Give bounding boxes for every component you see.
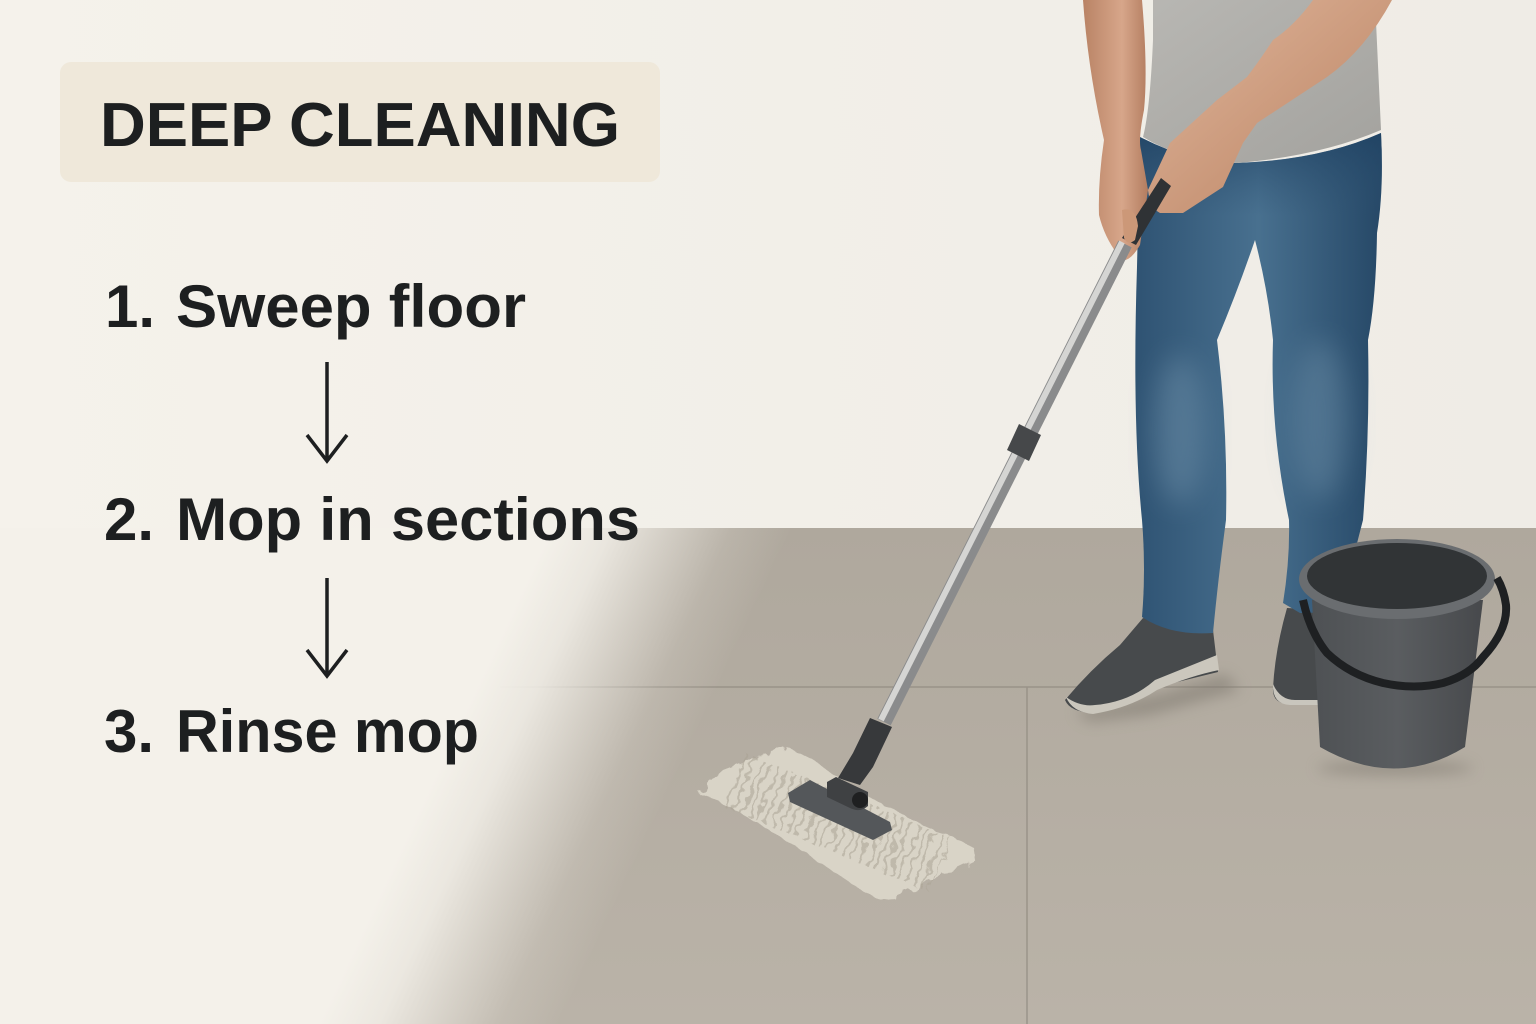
left arm and hand — [1083, 0, 1148, 260]
arrow 1 — [307, 362, 347, 461]
mop head — [698, 747, 975, 902]
step 1: Sweep floor — [176, 273, 526, 340]
step 2: Mop in sections — [176, 486, 640, 553]
mop socket — [827, 777, 868, 810]
tiled floor — [369, 528, 1536, 1024]
bucket body — [1312, 600, 1483, 768]
handle collar — [1007, 424, 1041, 461]
shoe shadow — [1075, 674, 1240, 722]
mop neck — [838, 718, 892, 785]
right arm and hand — [1148, 0, 1392, 213]
title badge: DEEP CLEANING — [100, 91, 620, 160]
person — [1065, 0, 1392, 722]
step 1: 1. — [105, 273, 155, 340]
title badge — [60, 62, 660, 182]
mop pole — [881, 242, 1125, 722]
shirt — [1143, 0, 1381, 163]
bucket rim — [1299, 539, 1495, 619]
step 2: 2. — [104, 486, 154, 553]
step 3: 3. — [104, 698, 154, 765]
right shoe — [1273, 608, 1325, 704]
bucket — [1299, 539, 1506, 775]
mop — [698, 178, 1171, 902]
mop handle grip — [1122, 178, 1171, 245]
jeans — [1135, 133, 1382, 633]
mop base plate — [788, 780, 892, 840]
arrow 2 — [307, 578, 347, 676]
left shoe — [1065, 618, 1218, 713]
left hand fingers — [1122, 209, 1138, 243]
knee fading — [1154, 355, 1206, 505]
bucket handle — [1303, 578, 1506, 686]
step 3: Rinse mop — [176, 698, 479, 765]
